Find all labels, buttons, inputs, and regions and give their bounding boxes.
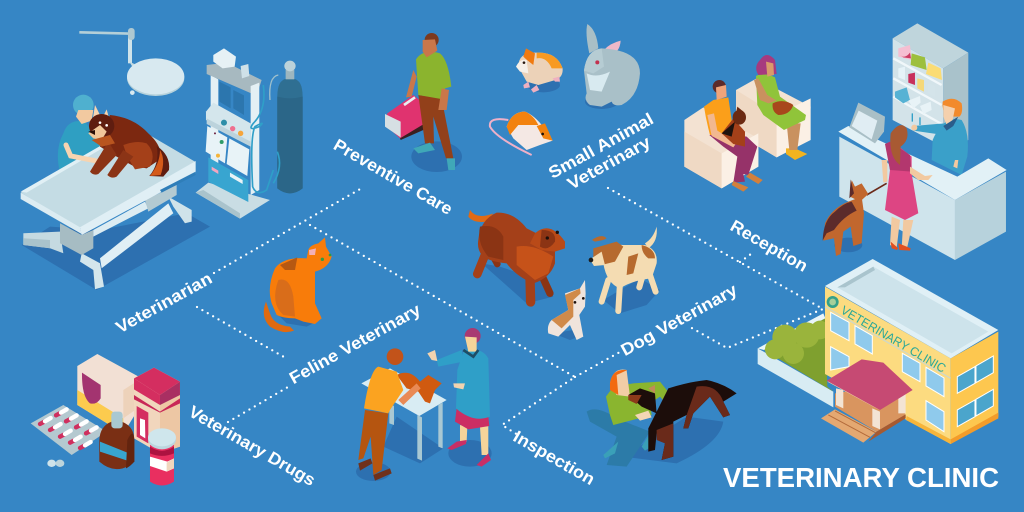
icon: red medicine box (134, 368, 180, 453)
label: Preventive Care: Preventive Care (330, 135, 456, 219)
icon: rat (490, 112, 553, 155)
label: Veterinary Drugs: Veterinary Drugs (185, 402, 319, 490)
icon: armchairs with seated couple (684, 78, 811, 188)
dotted connector lines (197, 188, 823, 435)
panel: veterinary drugs (31, 354, 180, 485)
title: VETERINARY CLINIC (723, 462, 999, 493)
icon: surgical lamp (79, 28, 184, 96)
icon: vet in scrubs (58, 95, 103, 170)
label: Small Animal Veterinary: Veterinary (564, 132, 654, 194)
icon: large brown dog (468, 210, 565, 303)
icon: gas cylinder (273, 61, 303, 193)
icon: garden and fence (758, 313, 833, 407)
icon: exam table with pet owner (356, 348, 447, 481)
panel: inspection scenes (356, 328, 737, 481)
icon: guinea pig (516, 48, 563, 93)
icon: orange tabby cat (264, 237, 332, 332)
panel: veterinarian operating room (21, 28, 303, 290)
icon: loose tablets (47, 460, 64, 467)
icon: kneeling man hugging dog (587, 369, 737, 467)
icon: examination table (21, 126, 210, 290)
label: Veterinarian: Veterinarian (113, 269, 215, 337)
icon: small chihuahua (548, 280, 586, 340)
icon: vet with stethoscope (427, 328, 492, 467)
label: Inspection: Inspection (510, 427, 598, 489)
icon: blister pack (31, 405, 107, 455)
icon: shepherd dog on leash (823, 179, 887, 256)
icon: shepherd dog on table (88, 105, 169, 178)
icon: anesthesia machine (196, 48, 278, 219)
icon: clinic building (825, 259, 998, 444)
panel: reception (684, 23, 1007, 260)
icon: yellow medicine box (77, 354, 140, 433)
icon: entrance porch (821, 359, 913, 443)
facade sign: VETERINARY CLINIC (838, 303, 948, 376)
panel: preventive care man and small animals (385, 24, 640, 172)
icon: receptionist (911, 99, 968, 175)
label: Dog Veterinary: Dog Veterinary (618, 280, 741, 360)
icon: vet arm (66, 145, 100, 162)
icon: pill jar (148, 428, 176, 485)
label: Reception: Reception (727, 216, 811, 276)
label: Feline Veterinary: Feline Veterinary (286, 300, 424, 388)
panel: cat and dogs (264, 210, 660, 340)
clinic logo badge (827, 296, 839, 308)
label: Small Animal Veterinary: Small Animal (545, 109, 657, 183)
icon: medicine shelf (893, 23, 968, 153)
icon: man with pet carrier (385, 33, 462, 172)
icon: man in orange shirt with small dog (704, 80, 763, 192)
icon: woman in pink dress (882, 125, 933, 251)
icon: rabbit (584, 24, 640, 109)
icon: woman in green dress (754, 55, 807, 160)
icon: brown bottle (99, 412, 134, 469)
icon: reception counter (838, 103, 1007, 260)
icon: white and tan dog (589, 227, 660, 313)
panel: clinic building (758, 259, 998, 444)
